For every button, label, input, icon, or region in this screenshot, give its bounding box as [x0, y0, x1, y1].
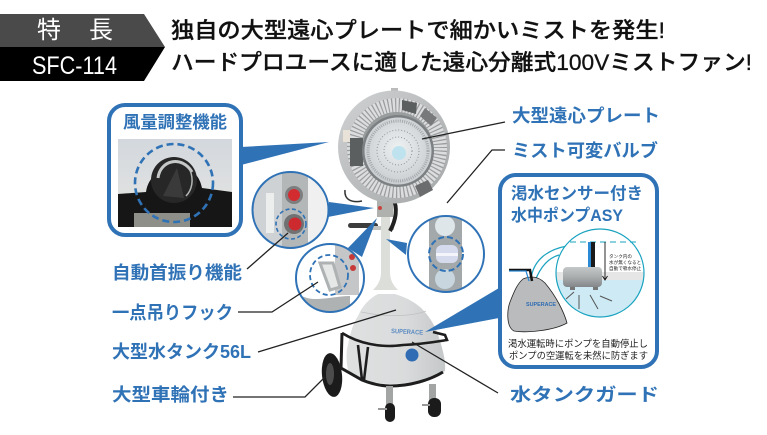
panel: wind volume adjustment: [109, 105, 329, 235]
label: 大型車輪付き: 大型車輪付き: [112, 385, 229, 405]
heading: 渇水センサー付き水中ポンプASY: 水中ポンプASY: [511, 205, 623, 225]
fan stand and pole: [345, 190, 398, 290]
header badge: 特長 SFC-114: 長: [89, 17, 113, 44]
diagram: pump cover: [508, 270, 567, 332]
heading: 渇水センサー付き水中ポンプASY: 渇水センサー付き: [511, 184, 643, 203]
label: 大型水タンク56L: 大型水タンク56L: [112, 342, 251, 362]
detail circle: mist valve: [386, 215, 484, 293]
panel caption: 渇水運転時にポンプを自動停止し: [508, 338, 648, 350]
panel caption: [508, 338, 648, 362]
diagram: pump in tank: [531, 229, 644, 320]
photo: adjustment knob: [118, 139, 232, 227]
diagram: pump cover: SUPERACE: [526, 302, 557, 308]
label: 大型車輪付き: [112, 377, 325, 405]
diagram: pump in tank: 自動で吸水停止: [609, 265, 642, 272]
label: ミスト可変バルブ: ミスト可変バルブ: [512, 140, 658, 161]
heading: 風量調整機能: 風量調整機能: [123, 112, 227, 132]
water tank: [346, 294, 445, 384]
fan product photo: [320, 88, 450, 422]
panel: low-water sensor pump: [425, 175, 657, 367]
panel caption: ポンプの空運転を未然に防ぎます: [509, 350, 648, 362]
diagram: pump in tank: タンク内の: [609, 253, 632, 260]
detail circle: hanging hook: [296, 218, 377, 313]
label: 水タンクガード: 水タンクガード: [510, 385, 659, 405]
heading: 渇水センサー付き水中ポンプASY: [511, 184, 643, 225]
large wheel: [320, 352, 344, 398]
label: 自動首振り機能: 自動首振り機能: [112, 263, 242, 283]
header badge: 特長 SFC-114: [0, 14, 165, 81]
label: 一点吊りフック: 一点吊りフック: [112, 303, 233, 323]
label: 大型遠心プレート: 大型遠心プレート: [512, 106, 660, 126]
label: 一点吊りフック: [112, 282, 318, 323]
label: ミスト可変バルブ: [447, 140, 658, 203]
water tank: SUPERACE: [391, 328, 424, 337]
detail circle: swing switch: [252, 172, 374, 250]
fan head: [338, 88, 450, 204]
label: 水タンクガード: [412, 342, 659, 405]
label: 大型遠心プレート: [422, 106, 660, 139]
header badge: 特長 SFC-114: SFC-114: [32, 52, 117, 80]
label: 自動首振り機能: [112, 233, 288, 283]
label: 大型水タンク56L: [112, 310, 396, 362]
tank guard: [341, 332, 447, 386]
headline text: 独自の大型遠心プレートで細かいミストを発生!: [171, 18, 665, 43]
diagram: pump in tank: 水が無くなると: [609, 259, 641, 266]
headline text: ハードプロユースに適した遠心分離式100Vミストファン!: [171, 50, 752, 75]
header badge: 特長 SFC-114: 特: [37, 17, 61, 44]
headline text: [171, 18, 752, 75]
casters: [378, 384, 441, 422]
